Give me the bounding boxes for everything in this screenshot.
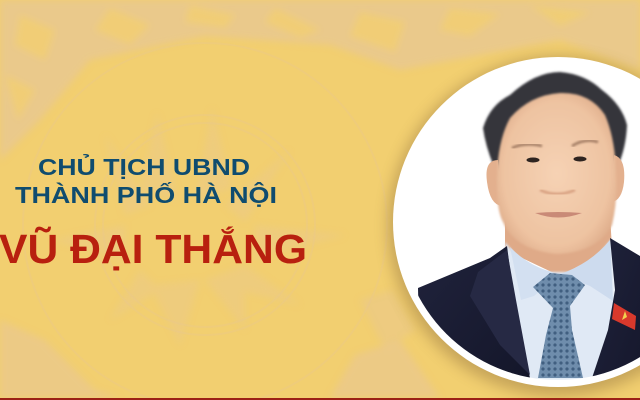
lapel: [470, 250, 530, 375]
heading: title: CHỦ TỊCH UBND: [38, 152, 250, 180]
shirt: [505, 238, 618, 380]
ears: [486, 160, 500, 206]
icon: compass star: [52, 108, 345, 345]
background: drum rings: [23, 43, 387, 400]
neck: [505, 223, 612, 274]
suit jacket: [418, 246, 530, 378]
hair: [483, 72, 627, 176]
mouth: [535, 212, 582, 218]
necktie: [533, 273, 585, 378]
circle shadow: [388, 56, 640, 396]
heading: title: [15, 152, 277, 208]
icon: flag pin: [612, 303, 636, 330]
portrait: man: [418, 72, 640, 400]
heading: title: THÀNH PHỐ HÀ NỘI: [15, 181, 277, 208]
nose: [540, 190, 575, 194]
heading: name: VŨ ĐẠI THẮNG: [0, 226, 307, 272]
bottom red line: [0, 398, 640, 400]
portrait: white circle: [393, 57, 640, 387]
eyebrows: [512, 144, 542, 148]
eyes: [526, 158, 540, 162]
shirt collar: [510, 247, 560, 300]
face: [497, 93, 616, 254]
